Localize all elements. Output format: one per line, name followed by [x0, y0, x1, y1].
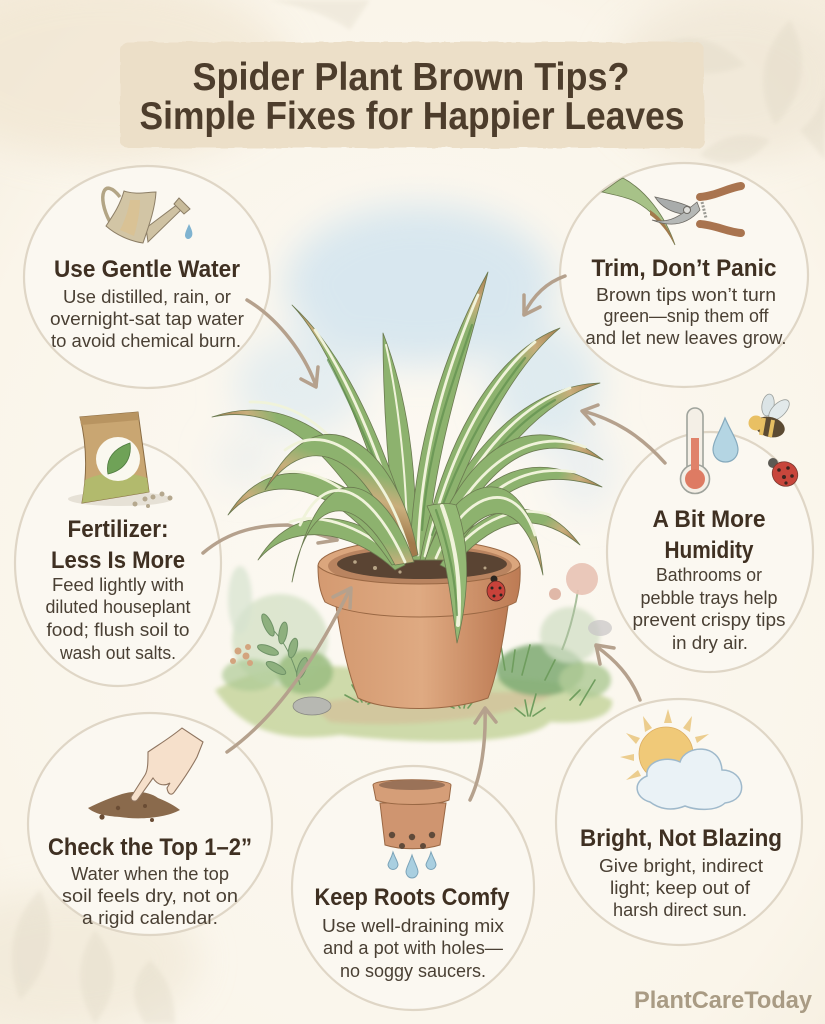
title text: Spider Plant Brown Tips? [192, 56, 630, 99]
panel: keep roots comfy [292, 766, 534, 1010]
body text [599, 856, 763, 920]
body text: Give bright, indirect [599, 856, 763, 876]
body text [50, 287, 244, 351]
heading: Bright, Not Blazing [580, 825, 782, 852]
arrow: trim [524, 276, 565, 315]
heading: Humidity [664, 537, 754, 564]
body text: a rigid calendar. [82, 908, 218, 928]
body text: diluted houseplant [46, 597, 190, 617]
heading [652, 506, 766, 564]
leaf: right upper long [420, 383, 600, 560]
icon: sun and cloud [620, 709, 742, 809]
body text: pebble trays help [640, 588, 778, 608]
ground and foliage [215, 563, 612, 741]
leaf: drooping right [425, 487, 543, 575]
arrow: humidity [582, 405, 665, 463]
pot back rim and soil [318, 540, 520, 592]
sky watercolor wash behind plant [215, 205, 615, 510]
icon: water drop [713, 418, 738, 462]
panel: check the top [28, 713, 272, 935]
title text [140, 56, 684, 138]
leaf: far left [212, 402, 415, 560]
arrow: keep roots [470, 708, 496, 800]
body text: soil feels dry, not on [62, 886, 238, 906]
body text: green—snip them off [604, 306, 769, 326]
panel: fertilizer [15, 412, 221, 686]
spider plant [212, 272, 603, 643]
body text: Water when the top [71, 864, 229, 884]
leaf: right low arc [435, 467, 602, 560]
leaf: right lower [440, 509, 580, 570]
leaf: left upper arc [265, 434, 418, 560]
icon: small pot with drainage holes [373, 780, 451, 878]
heading: A Bit More [652, 506, 766, 533]
body text [322, 916, 504, 981]
leaf: top center [410, 272, 488, 560]
leaf: center narrow [383, 333, 415, 560]
title banner [120, 42, 704, 148]
body text: to avoid chemical burn. [51, 331, 241, 351]
body text: light; keep out of [610, 878, 751, 898]
body text [62, 864, 238, 928]
heading: Trim, Don’t Panic [592, 255, 776, 282]
body text [46, 575, 190, 663]
plant pot [318, 540, 520, 708]
pebble [293, 697, 331, 715]
icon: thermometer [680, 408, 710, 494]
brand logo: PlantCareToday [634, 987, 813, 1014]
arrow: bright [596, 645, 640, 700]
small flowers [230, 644, 253, 666]
heading: Keep Roots Comfy [314, 884, 510, 911]
heading: Less Is More [51, 547, 185, 574]
body text: prevent crispy tips [632, 610, 786, 630]
leaf: upper left [292, 305, 418, 555]
leaf: right arc [425, 435, 603, 560]
body text: Use distilled, rain, or [63, 287, 231, 307]
body text: wash out salts. [59, 643, 176, 663]
body text: no soggy saucers. [340, 961, 486, 981]
panel: use gentle water [24, 166, 270, 388]
body text: food; flush soil to [46, 620, 190, 640]
body text [586, 285, 786, 348]
leaf: lower left [258, 518, 405, 570]
icon: hand and soil [88, 728, 203, 822]
heading: Fertilizer: [68, 516, 168, 543]
body text: and let new leaves grow. [586, 328, 786, 348]
body text: Bathrooms or [656, 565, 762, 585]
title text: Simple Fixes for Happier Leaves [140, 95, 684, 138]
grass tufts [345, 640, 595, 716]
arrow: fertilizer to plant (behind leaves) [203, 525, 337, 553]
heading [51, 516, 185, 574]
body text: and a pot with holes— [323, 938, 503, 958]
leaf: left lower arc [292, 487, 414, 582]
body text: harsh direct sun. [613, 900, 747, 920]
body text [632, 565, 786, 653]
arrow: check the top [227, 588, 351, 752]
icon: watering can [103, 188, 192, 243]
panel: bright, not blazing [556, 699, 802, 945]
body text: in dry air. [672, 633, 748, 653]
icon: ladybug [768, 457, 802, 491]
body text: Feed lightly with [52, 575, 184, 595]
leaf: left mid [228, 471, 410, 565]
arrow: gentle water [247, 300, 318, 387]
branch sprig [256, 612, 310, 685]
pot body [336, 606, 508, 708]
body text: overnight-sat tap water [50, 309, 244, 329]
leaf: front drooping [427, 504, 467, 643]
leaf: upper right [420, 328, 560, 560]
heading: Check the Top 1–2” [48, 834, 252, 861]
icon: ladybug on pot [487, 576, 505, 601]
icon: fertilizer bag [68, 412, 172, 508]
icon: pruning shears with leaf [602, 178, 741, 245]
heading: Use Gentle Water [54, 256, 240, 283]
pot rim front [318, 566, 520, 617]
panel: trim, don't panic [560, 163, 808, 387]
body text: Brown tips won’t turn [596, 285, 776, 305]
body text: Use well-draining mix [322, 916, 504, 936]
panel: humidity [607, 393, 813, 672]
icon: bee [748, 393, 793, 441]
